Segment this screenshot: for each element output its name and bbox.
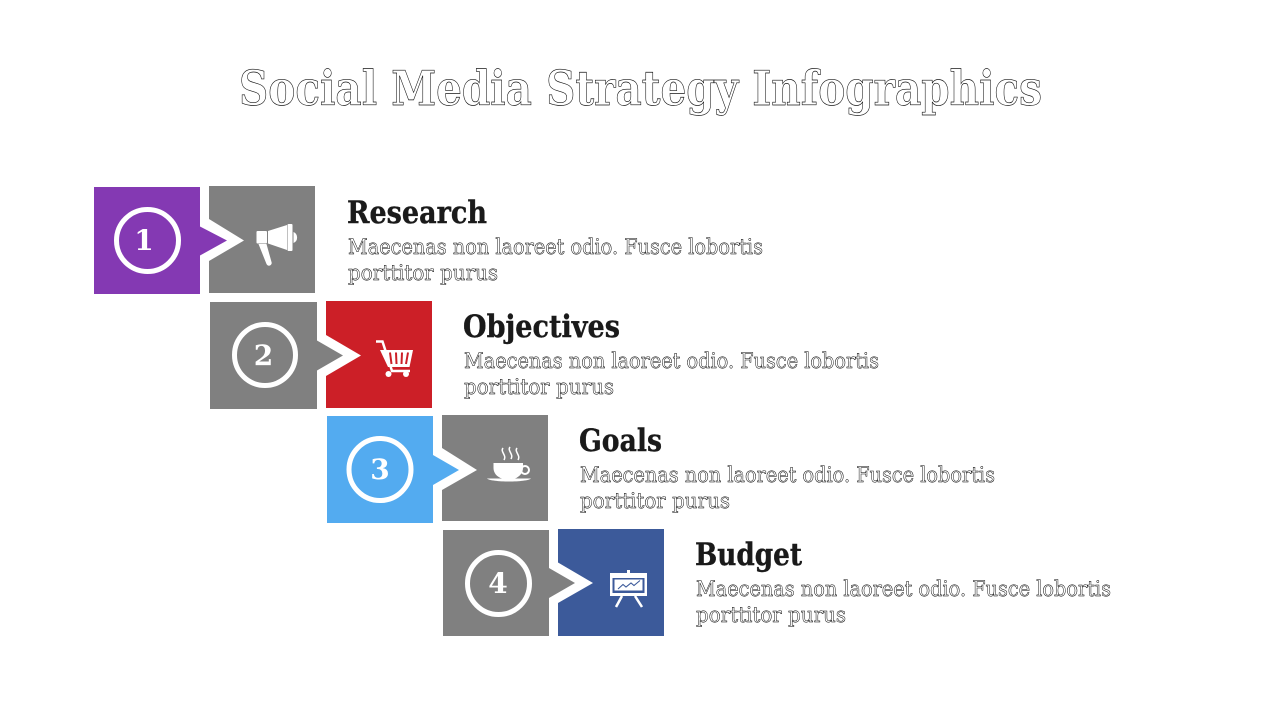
heading: budget: Budget (695, 537, 803, 573)
heading: research: Research (347, 195, 487, 231)
left panel: blue arrow (327, 416, 459, 523)
title: Social Media Strategy Infographics (239, 61, 1042, 117)
description text (348, 235, 763, 285)
number badge 4: 4 (488, 567, 508, 600)
left panel: grey arrow (443, 530, 575, 636)
description text: Maecenas non laoreet odio. Fusce lobortis (464, 349, 879, 373)
right panel: grey with notch (209, 186, 315, 293)
step 3: goals (327, 415, 995, 523)
number badge 4 (468, 552, 530, 614)
right panel: grey with notch (442, 415, 548, 521)
step 2: objectives (210, 301, 879, 409)
heading: goals: Goals (579, 423, 662, 459)
icon: shopping cart (376, 342, 413, 377)
description text: porttitor purus (696, 603, 846, 627)
number badge 3: 3 (370, 453, 390, 486)
description text (696, 577, 1111, 627)
heading: objectives: Objectives (463, 309, 620, 345)
icon: coffee cup (487, 447, 531, 482)
step 1: research (94, 186, 763, 294)
description text (464, 349, 879, 399)
description text: Maecenas non laoreet odio. Fusce lobortis (580, 463, 995, 487)
right panel: red with notch (326, 301, 432, 408)
description text: Maecenas non laoreet odio. Fusce lobortis (348, 235, 763, 259)
step 4: budget (443, 529, 1111, 636)
description text: porttitor purus (464, 375, 614, 399)
number badge 3 (349, 438, 411, 500)
number badge 2 (234, 324, 296, 386)
description text: porttitor purus (348, 261, 498, 285)
number badge 2: 2 (254, 339, 273, 372)
right panel: navy with notch (558, 529, 664, 636)
number badge 1 (116, 210, 178, 272)
icon: megaphone (256, 224, 297, 266)
description text (580, 463, 995, 513)
icon: presentation easel (610, 570, 647, 607)
left panel: purple arrow (94, 187, 227, 294)
description text: porttitor purus (580, 489, 730, 513)
left panel: grey arrow (210, 302, 343, 409)
description text: Maecenas non laoreet odio. Fusce lobortis (696, 577, 1111, 601)
number badge 1: 1 (134, 224, 154, 257)
